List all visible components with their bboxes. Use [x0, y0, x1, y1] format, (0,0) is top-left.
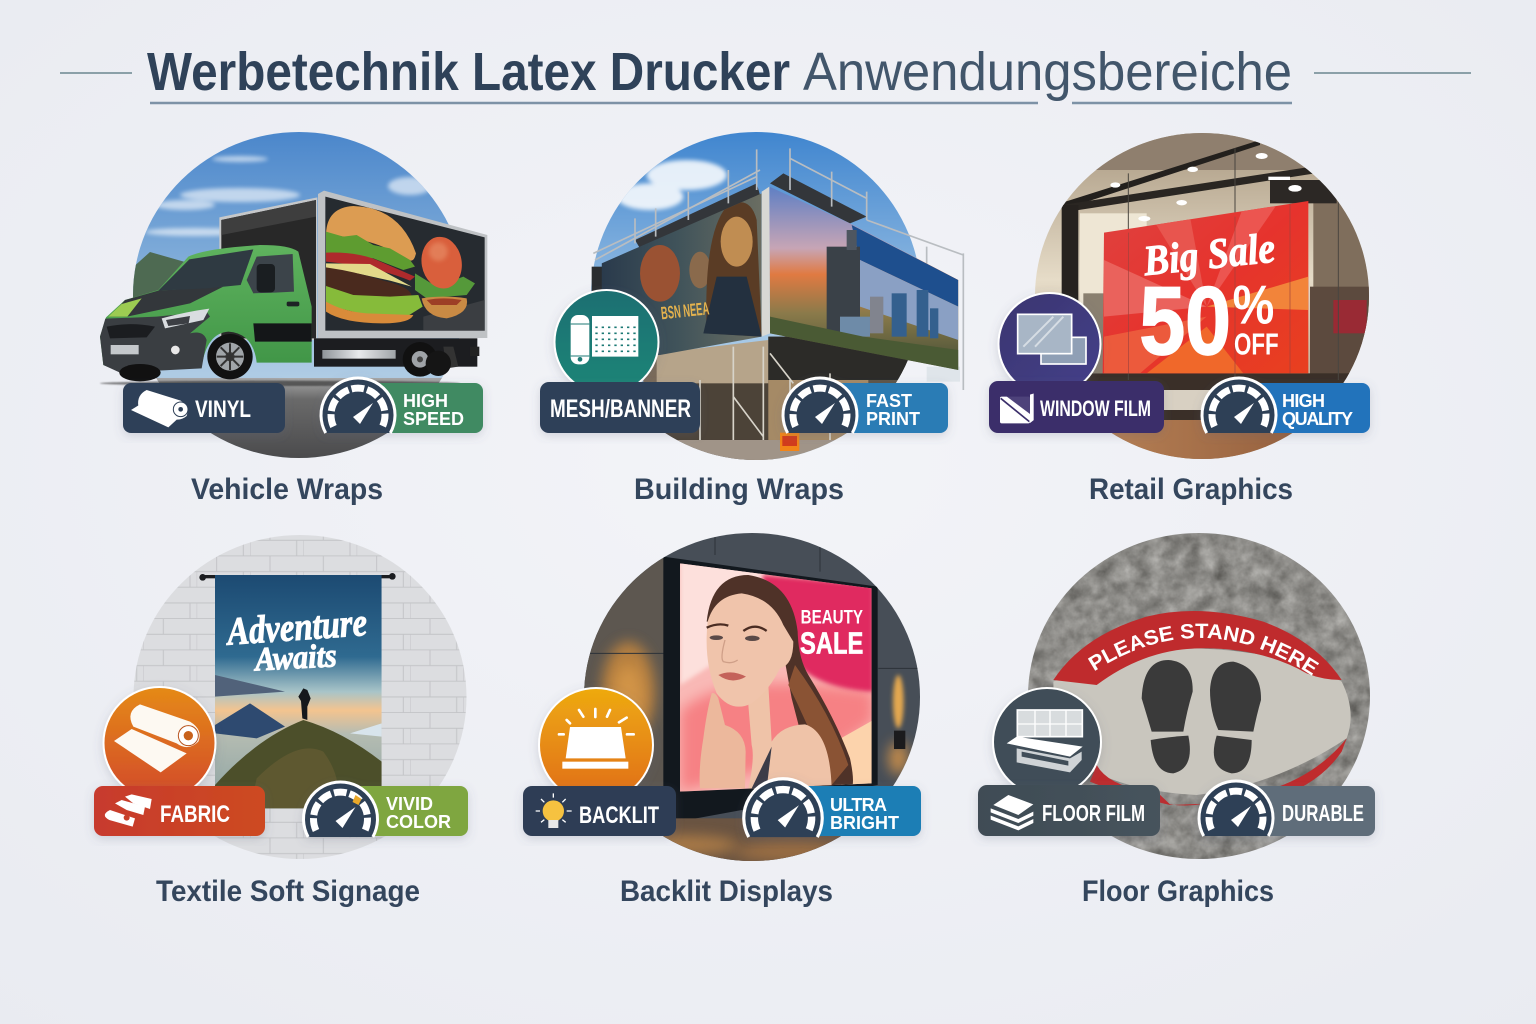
caption: building wraps: Building Wraps [634, 473, 844, 506]
title regular part: Anwendungsbereiche [803, 42, 1292, 102]
badge: backlit [523, 786, 676, 836]
text: adventure: Adventure [223, 600, 368, 654]
circle photo background [1030, 130, 1377, 463]
icon: light panel [539, 688, 653, 802]
gauge icon [304, 782, 378, 837]
icon: window panes [998, 293, 1100, 395]
label: high speed: HIGH [403, 391, 448, 411]
orange sign [780, 433, 799, 451]
label: fast print: PRINT [866, 409, 920, 429]
caption: floor graphics: Floor Graphics [1082, 875, 1274, 908]
text: percent: % [1233, 273, 1274, 335]
caption: backlit displays: Backlit Displays [620, 875, 833, 908]
panel: textile soft signage [94, 525, 477, 868]
label: ultra bright: ULTRA [830, 795, 887, 815]
small burger [415, 273, 475, 298]
body [748, 685, 832, 788]
label: window film: WINDOW FILM [1040, 396, 1151, 421]
circle photo background [1028, 533, 1370, 859]
icon: fabric rolls [105, 794, 152, 827]
badge: high quality [1202, 378, 1370, 433]
label: high quality: QUALITY [1282, 409, 1353, 429]
icon: floor film panels [993, 688, 1101, 796]
sale poster [1103, 200, 1308, 375]
panel: floor graphics [974, 533, 1378, 859]
badge: window film [989, 381, 1164, 433]
badge: ultra bright [744, 779, 921, 837]
text: beauty: BEAUTY [801, 607, 863, 628]
gauge icon [1199, 781, 1273, 836]
truck illustration [100, 191, 487, 386]
right mural [769, 187, 959, 373]
hair [707, 575, 853, 788]
circle photo background [130, 130, 470, 463]
left mural: BSN NEEA [660, 298, 710, 323]
badge: fabric [94, 786, 265, 836]
icon: film stack [991, 795, 1033, 830]
footprints [1142, 660, 1261, 773]
icon: fabric roll [104, 687, 216, 799]
hanging banner [199, 573, 396, 808]
panel: retail graphics [989, 130, 1377, 463]
icon: window film [1000, 394, 1033, 423]
label: high quality: HIGH [1282, 391, 1325, 411]
badge: mesh/banner [540, 382, 700, 433]
badge: vivid color [304, 782, 468, 837]
panel: vehicle wraps [100, 130, 487, 463]
gauge icon [321, 378, 395, 433]
text: 50: 50 [1139, 267, 1231, 375]
circle photo background [578, 525, 928, 868]
badge: fast print [783, 378, 948, 433]
chassis [314, 338, 477, 367]
caption: vehicle wraps: Vehicle Wraps [191, 473, 383, 506]
label: vinyl: VINYL [195, 396, 251, 423]
label: fast print: FAST [866, 391, 912, 411]
panel: backlit displays [523, 525, 928, 868]
left mural [592, 192, 763, 358]
caption: retail graphics: Retail Graphics [1089, 473, 1293, 506]
label: durable: DURABLE [1282, 800, 1364, 826]
label: fabric: FABRIC [160, 801, 230, 828]
icon: mesh banner [554, 290, 658, 394]
text: sale: SALE [800, 626, 863, 660]
label: floor film: FLOOR FILM [1042, 800, 1145, 826]
gauge icon [744, 779, 822, 837]
label: ultra bright: BRIGHT [830, 813, 899, 833]
panel: building wraps [540, 130, 968, 465]
text: please stand here [1094, 638, 1308, 673]
face [707, 593, 793, 707]
beauty poster [680, 562, 873, 793]
text: awaits: Awaits [252, 637, 338, 679]
hand [700, 693, 746, 788]
icon: vinyl roll [131, 390, 188, 427]
label: vivid color: COLOR [386, 812, 451, 832]
title bold part: Werbetechnik Latex Drucker [147, 42, 790, 102]
title [60, 42, 1471, 103]
badge: high speed [321, 378, 483, 433]
gauge icon [1202, 378, 1276, 433]
badge: floor film [978, 785, 1160, 836]
badge: vinyl [123, 383, 285, 433]
big burger [326, 206, 416, 261]
text: big sale: Big Sale [1141, 225, 1277, 285]
label: backlit: BACKLIT [579, 802, 659, 829]
circle photo background [591, 132, 916, 460]
caption: textile soft signage: Textile Soft Signage [156, 875, 420, 908]
label: mesh/banner: MESH/BANNER [550, 395, 691, 423]
icon: light bulb [536, 793, 572, 828]
badge: durable [1199, 781, 1375, 836]
cab [100, 245, 312, 372]
brick wall [134, 535, 466, 859]
circle photo background: PLEASE STAND HERE [1088, 624, 1319, 676]
scaffolding wrap [592, 148, 963, 451]
text: off: OFF [1234, 327, 1279, 361]
gauge icon [783, 378, 857, 433]
label: vivid color: VIVID [386, 794, 433, 814]
label: high speed: SPEED [403, 409, 464, 429]
